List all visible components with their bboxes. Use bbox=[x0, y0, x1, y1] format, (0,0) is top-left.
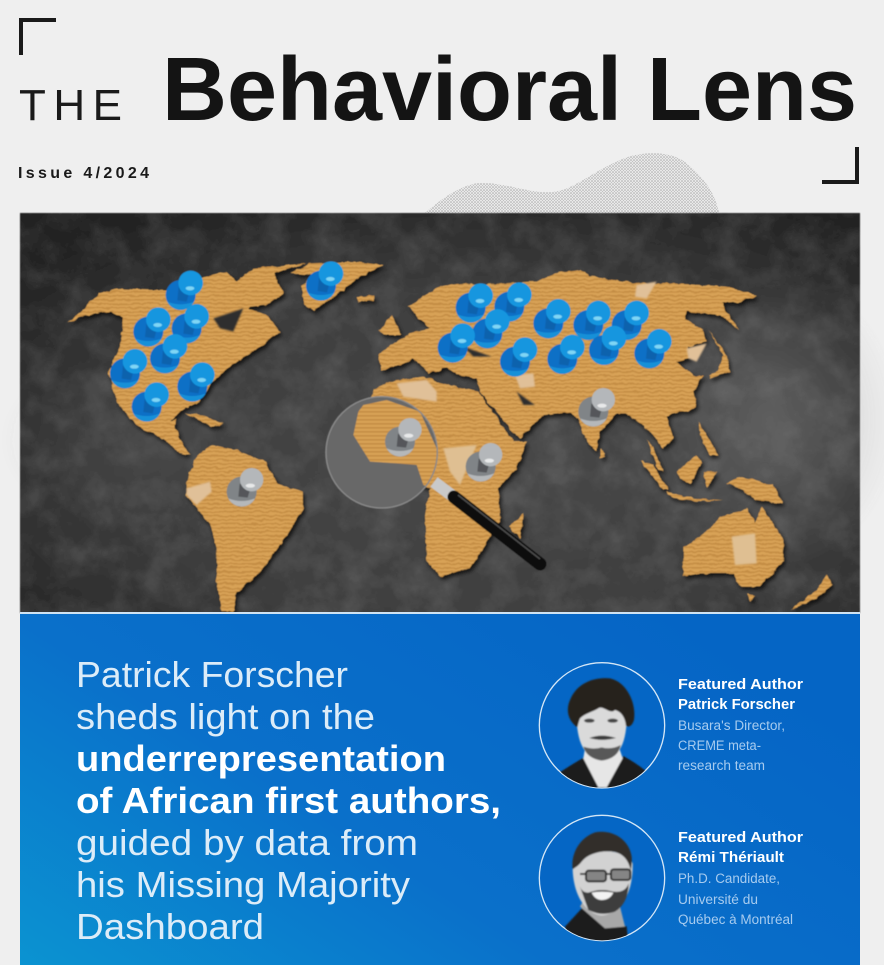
text: Patrick Forscher author block: Busara's Director, bbox=[678, 718, 785, 733]
text: Rémi Thériault author block bbox=[678, 829, 803, 927]
magnifying glass bbox=[326, 397, 540, 564]
blue pins: Europe and Asia bbox=[438, 282, 672, 377]
map: Eurasia, Africa, Oceania bbox=[363, 270, 833, 610]
map background bbox=[0, 213, 884, 613]
text: Rémi Thériault author block: Featured Author bbox=[678, 829, 803, 846]
white separator line bbox=[20, 612, 860, 614]
lens bbox=[326, 397, 440, 508]
headline text block: his Missing Majority bbox=[76, 864, 410, 905]
map: Americas, Greenland, Iceland and UK bbox=[67, 262, 402, 612]
title: Behavioral Lens: Behavioral Lens bbox=[162, 40, 857, 140]
label: THE: THE bbox=[19, 81, 122, 130]
headline text block bbox=[76, 654, 501, 947]
gray pins: South America, India, East Africa bbox=[227, 388, 615, 507]
text: Patrick Forscher author block: Patrick Forscher bbox=[678, 696, 795, 713]
text: Rémi Thériault author block: Ph.D. Candidate, bbox=[678, 871, 780, 886]
text: Patrick Forscher author block: Featured Author bbox=[678, 676, 803, 693]
headline text block: guided by data from bbox=[76, 822, 418, 863]
headline text block: underrepresentation bbox=[76, 738, 446, 779]
text: Rémi Thériault author block: Rémi Thériault bbox=[678, 849, 784, 866]
text: Rémi Thériault author block: Université du bbox=[678, 892, 758, 907]
text: Patrick Forscher author block bbox=[678, 676, 803, 773]
panel: blue feature area bbox=[20, 614, 860, 965]
text: Rémi Thériault author block: Québec à Montréal bbox=[678, 912, 793, 927]
text: Patrick Forscher author block: CREME meta- bbox=[678, 738, 761, 753]
headline text block: sheds light on the bbox=[76, 696, 375, 737]
blue pins: North America and Greenland bbox=[110, 261, 343, 422]
icon: top-left corner bracket bbox=[21, 20, 56, 55]
headline text block: Dashboard bbox=[76, 906, 264, 947]
halftone hill decoration bbox=[425, 153, 719, 213]
headline text block: Patrick Forscher bbox=[76, 654, 348, 695]
handle bbox=[434, 482, 540, 564]
map details: seas and pale torn patches bbox=[187, 282, 757, 565]
portrait: Rémi Thériault bbox=[539, 815, 665, 943]
text: Patrick Forscher author block: research team bbox=[678, 758, 765, 773]
panel: world map photo bbox=[0, 213, 884, 613]
icon: bottom-right corner bracket bbox=[822, 147, 857, 182]
headline text block: of African first authors, bbox=[76, 780, 501, 821]
portrait: Patrick Forscher bbox=[539, 663, 665, 790]
issue label: Issue 4/2024 bbox=[18, 165, 149, 182]
